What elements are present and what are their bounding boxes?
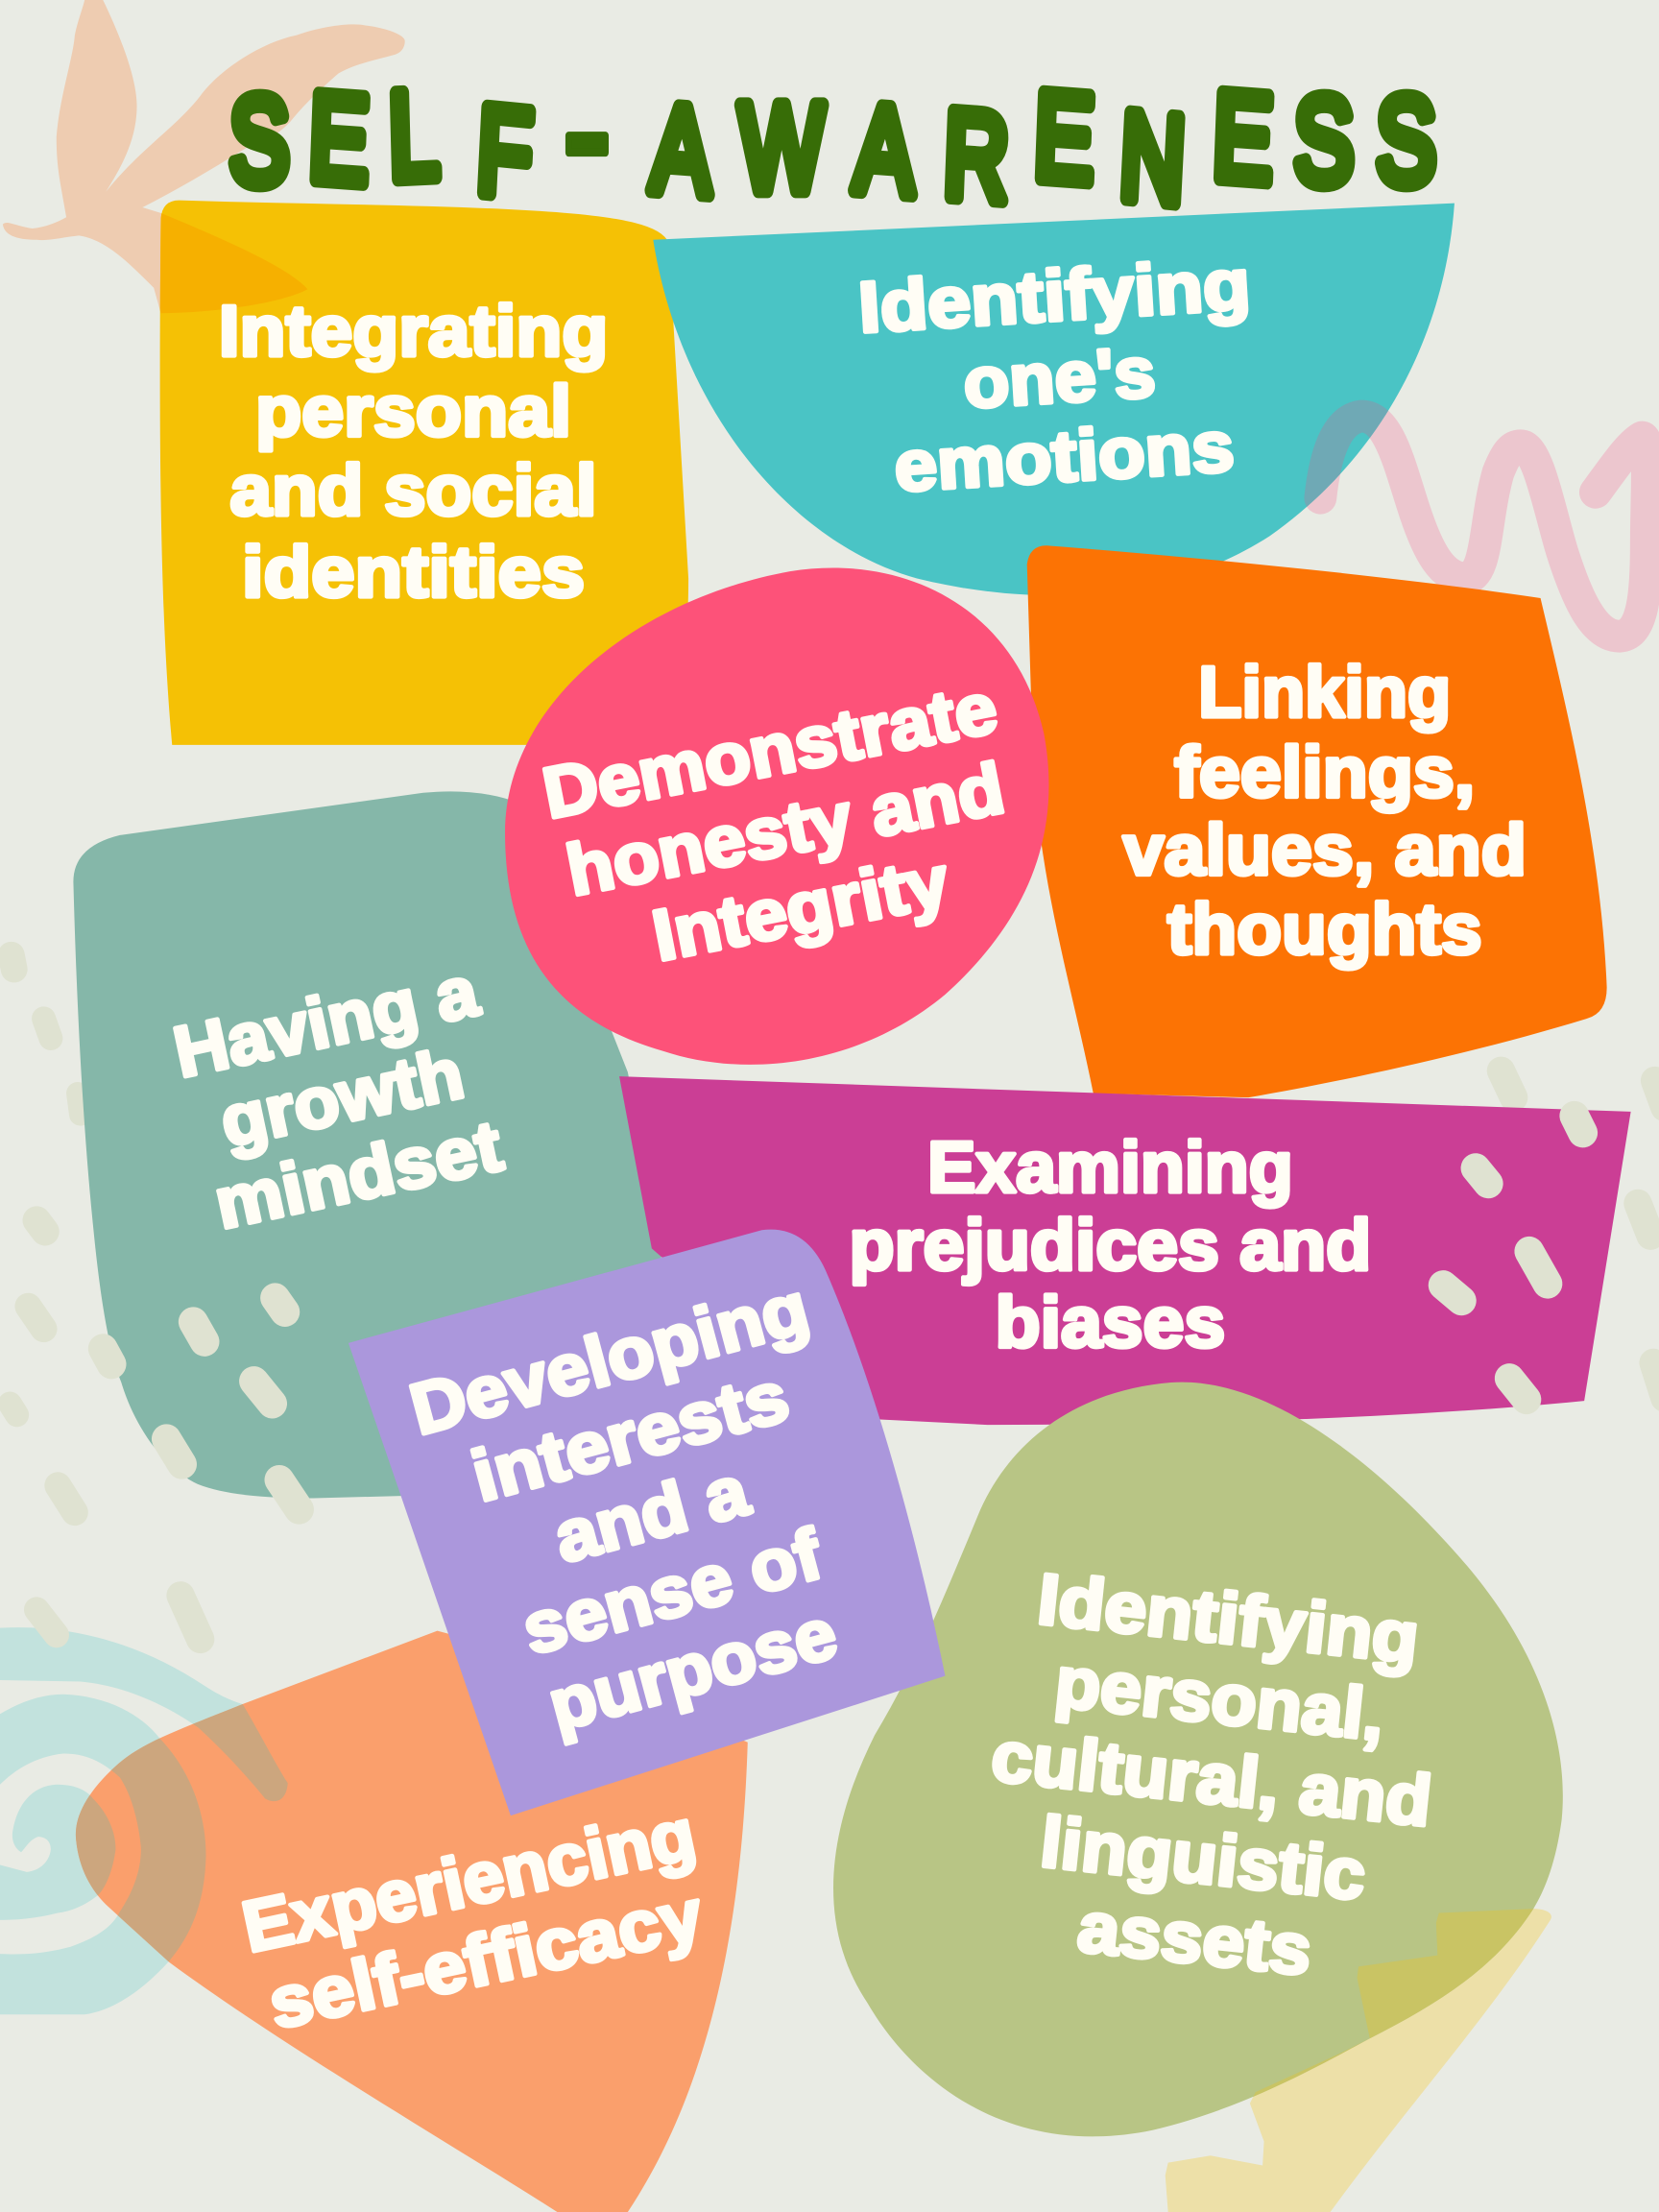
text: having a growth mindset: growth [213, 1032, 470, 1162]
zigzag overlap on olive blob [1254, 1909, 1534, 2097]
panel: honesty and integrity (pink blob) [505, 567, 1048, 1065]
panel: linking feelings (orange) [1027, 545, 1607, 1097]
text: integrating personal and social identities: identities [242, 532, 585, 613]
decoration: dashes on sage panel [103, 1298, 300, 1509]
decoration: pink squiggle [1320, 416, 1647, 637]
text: identifying one's emotions: emotions [892, 405, 1237, 507]
text: examining prejudices and biases: prejudices and [850, 1204, 1371, 1285]
text: integrating personal and social identities [219, 290, 608, 613]
text: identifying personal, cultural, and linguistic assets: cultural, and [988, 1715, 1435, 1841]
leaf overlap on yellow panel [159, 213, 307, 313]
decoration: pale yellow zigzag [1166, 1909, 1551, 2212]
title: N [1117, 85, 1189, 230]
text: examining prejudices and biases: Examining [927, 1127, 1293, 1208]
title: E [1032, 65, 1096, 208]
text: examining prejudices and biases [850, 1127, 1371, 1362]
text: demonstrate honesty and integrity: Demonstrate [537, 666, 1003, 833]
text: developing interests and a sense of purpose: sense of [515, 1512, 830, 1670]
text: linking feelings, values, and thoughts [1123, 651, 1527, 969]
panel: identifying assets (olive blob) [833, 1382, 1563, 2136]
text: developing interests and a sense of purpose: purpose [541, 1592, 845, 1745]
text: linking feelings, values, and thoughts: thoughts [1167, 888, 1482, 969]
text: experiencing self-efficacy [235, 1792, 719, 2046]
text: developing interests and a sense of purpose: interests [464, 1356, 797, 1517]
panel: identifying emotions (teal bowl) [653, 204, 1455, 595]
panel: self-efficacy (light orange) [76, 1631, 748, 2212]
text: linking feelings, values, and thoughts: Linking [1198, 651, 1451, 732]
text: identifying one's emotions [856, 243, 1262, 508]
title: S [229, 71, 289, 210]
text: examining prejudices and biases: biases [996, 1282, 1225, 1362]
title: S [1294, 71, 1354, 210]
text: linking feelings, values, and thoughts: feelings, [1174, 732, 1475, 812]
panel: integrating identities (yellow) [160, 201, 688, 745]
spiral overlap on light orange panel [75, 1704, 288, 1961]
decoration: peach leaf [3, 0, 405, 313]
text: identifying personal, cultural, and linguistic assets [971, 1555, 1453, 2001]
text: developing interests and a sense of purpose [402, 1266, 900, 1761]
text: integrating personal and social identities: Integrating [219, 290, 608, 371]
decoration: dashes on magenta panel [1443, 1116, 1583, 1400]
title: E [1211, 65, 1276, 208]
decoration: teal spiral [0, 1627, 288, 2014]
text: integrating personal and social identities: personal [255, 371, 571, 451]
text: having a growth mindset: Having a [167, 950, 486, 1093]
title: L [387, 64, 441, 205]
text: developing interests and a sense of purpose: and a [545, 1449, 757, 1578]
panel: examining prejudices (magenta) [619, 1076, 1631, 1425]
text: identifying personal, cultural, and linguistic assets: assets [1074, 1886, 1315, 1990]
title: E [307, 67, 372, 210]
title: A [649, 78, 714, 221]
text: identifying personal, cultural, and linguistic assets: Identifying [1034, 1558, 1423, 1678]
text: linking feelings, values, and thoughts: values, and [1123, 809, 1527, 890]
title: W [739, 78, 824, 217]
text: identifying personal, cultural, and linguistic assets: personal, [1051, 1641, 1388, 1755]
text: having a growth mindset [167, 950, 518, 1246]
text: integrating personal and social identities: and social [230, 449, 597, 530]
panel: interests and purpose (purple) [349, 1230, 945, 1815]
text: identifying personal, cultural, and linguistic assets: linguistic [1037, 1801, 1369, 1915]
decoration: background dashes [10, 955, 1659, 1639]
text: identifying one's emotions: one's [961, 331, 1158, 423]
title: A [853, 78, 917, 221]
title: R [942, 84, 1011, 228]
panel: growth mindset (sage green) [73, 791, 663, 1498]
text: identifying one's emotions: Identifying [856, 243, 1253, 348]
text: experiencing self-efficacy: Experiencing [235, 1792, 702, 1967]
text: having a growth mindset: mindset [207, 1105, 509, 1244]
text: experiencing self-efficacy: self-efficacy [262, 1873, 709, 2044]
squiggle overlap on teal panel [1304, 399, 1388, 507]
title: F [474, 80, 536, 224]
text: developing interests and a sense of purpose: Developing [402, 1266, 817, 1450]
text: demonstrate honesty and integrity: Integrity [646, 840, 955, 976]
text: demonstrate honesty and integrity [537, 666, 1034, 992]
text: demonstrate honesty and integrity: honesty and [560, 747, 1010, 911]
title: - [562, 9, 613, 246]
title: S [1377, 71, 1436, 210]
